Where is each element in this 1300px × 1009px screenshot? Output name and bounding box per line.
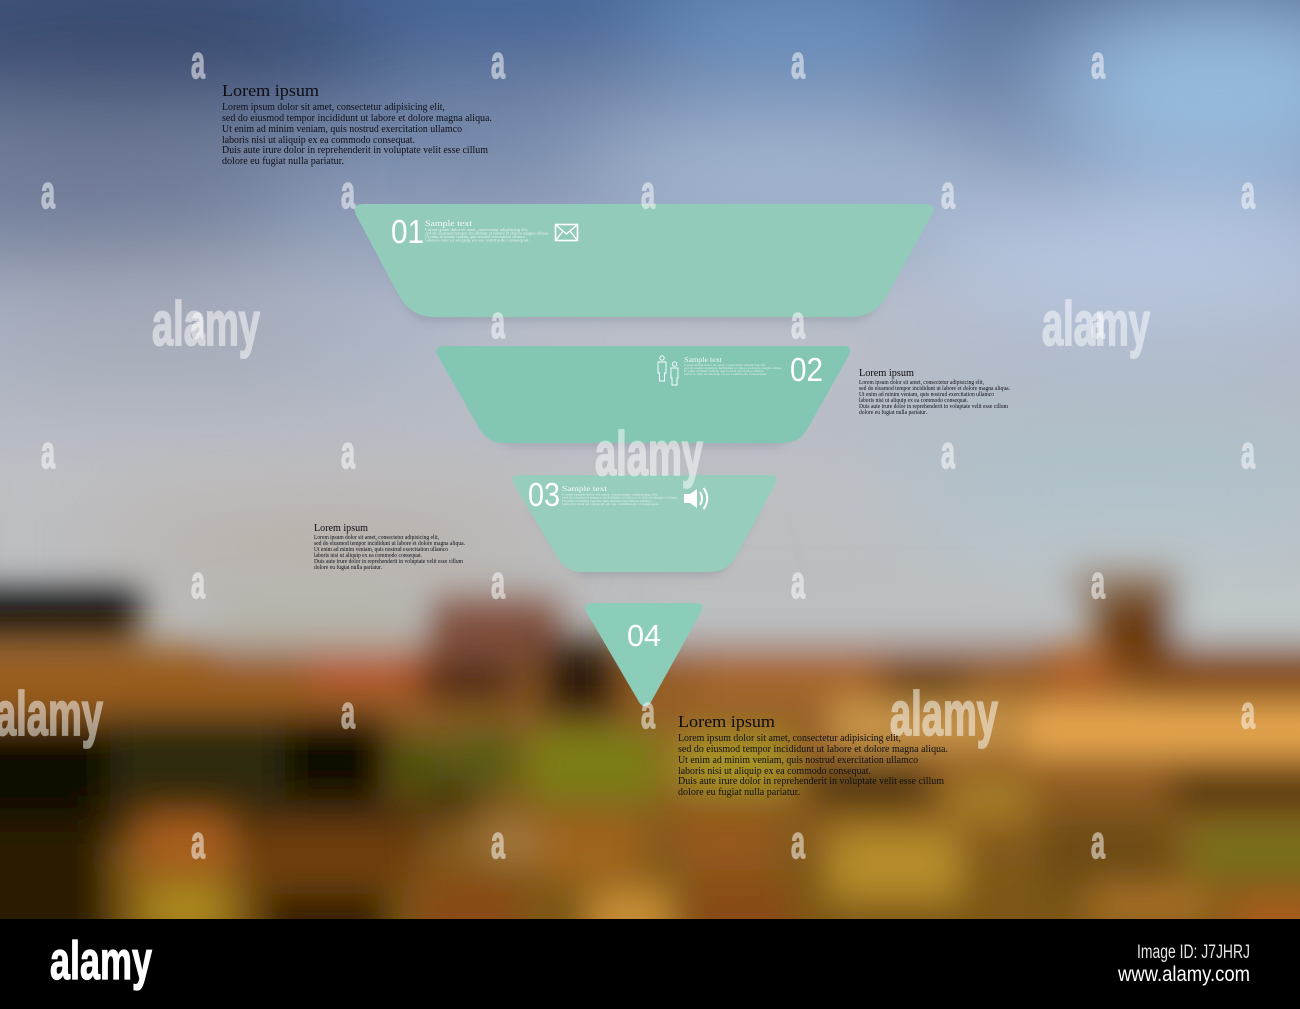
sample text 02 bbox=[684, 355, 782, 376]
text block: right of panel 02: Ut enim ad minim veniam, quis nostrud exercitation ullamco bbox=[859, 392, 994, 398]
panel 03 bbox=[512, 475, 777, 572]
website: www.alamy.com bbox=[1117, 963, 1250, 986]
text block: left of panel 03: Ut enim ad minim veniam, quis nostrud exercitation ullamco bbox=[314, 547, 448, 553]
watermark grid of letter a: a bbox=[341, 426, 355, 478]
sample text 02: sed do eiusmod tempor incididunt ut labore et dolore magna aliqua. bbox=[684, 366, 782, 370]
text block: top left bbox=[222, 81, 492, 167]
right tree bbox=[1095, 585, 1173, 675]
panel 01 bbox=[355, 204, 933, 317]
large alamy watermarks bbox=[0, 290, 1150, 749]
sample text 03: sed do eiusmod tempor incididunt ut labore et dolore magna aliqua. bbox=[562, 496, 678, 500]
watermark grid of letter a: a bbox=[1241, 426, 1255, 478]
right highlights bbox=[1020, 705, 1300, 755]
watermark grid of letter a: a bbox=[1091, 816, 1105, 868]
watermark grid of letter a: a bbox=[1091, 296, 1105, 348]
text block: top left: Lorem ipsum bbox=[222, 81, 319, 100]
watermark grid of letter a: a bbox=[1091, 36, 1105, 88]
watermark grid of letter a: a bbox=[491, 36, 505, 88]
text block: bottom right of panel 04: dolore eu fugiat nulla pariatur. bbox=[678, 787, 800, 798]
foreground bbox=[0, 820, 110, 960]
text block: right of panel 02: Lorem ipsum bbox=[859, 368, 914, 379]
watermark grid of letter a: a bbox=[491, 816, 505, 868]
footer bar bbox=[0, 919, 1300, 1009]
text block: right of panel 02: laboris nisi ut aliquip ex ea commodo consequat. bbox=[859, 398, 968, 404]
sample text 01: Ut enim ad minim veniam, quis nostrud exercitation ullamco bbox=[425, 235, 525, 240]
icon: envelope bbox=[556, 224, 578, 240]
text block: left of panel 03: sed do eiusmod tempor incididunt ut labore et dolore magna aliqua. bbox=[314, 541, 465, 547]
text block: left of panel 03: Lorem ipsum bbox=[314, 523, 368, 534]
large alamy watermarks: alamy bbox=[1042, 290, 1150, 359]
sample text 02: laboris nisi ut aliquip ex ea commodo consequat. bbox=[684, 372, 767, 376]
left tree line bbox=[0, 592, 140, 640]
sample text 03: Sample text bbox=[562, 484, 608, 493]
text block: top left: sed do eiusmod tempor incididunt ut labore et dolore magna aliqua. bbox=[222, 113, 492, 124]
text block: left of panel 03 bbox=[314, 523, 465, 571]
watermark grid of letter a: a bbox=[341, 686, 355, 738]
watermark grid of letter a: a bbox=[191, 36, 205, 88]
number 04: 04 bbox=[627, 618, 661, 653]
text block: bottom right of panel 04: Lorem ipsum dolor sit amet, consectetur adipisicing elit, bbox=[678, 733, 901, 744]
text block: top left: dolore eu fugiat nulla pariatur. bbox=[222, 156, 344, 167]
large alamy watermarks: alamy bbox=[152, 290, 260, 359]
text block: left of panel 03: Lorem ipsum dolor sit amet, consectetur adipisicing elit, bbox=[314, 535, 439, 541]
watermark grid of letter a: a bbox=[191, 816, 205, 868]
footer logo: alamy bbox=[50, 931, 152, 991]
panel 02 bbox=[437, 346, 850, 443]
text block: right of panel 02: Duis aute irure dolor in reprehenderit in voluptate velit esse cillum bbox=[859, 404, 1008, 410]
text block: left of panel 03: Duis aute irure dolor in reprehenderit in voluptate velit esse cillum bbox=[314, 559, 463, 565]
watermark grid of letter a: a bbox=[791, 556, 805, 608]
funnel panel shadows bbox=[375, 240, 905, 577]
text block: right of panel 02: dolore eu fugiat nulla pariatur. bbox=[859, 409, 927, 416]
large alamy watermarks: alamy bbox=[890, 680, 998, 749]
text block: bottom right of panel 04: sed do eiusmod tempor incididunt ut labore et dolore magna aliqua. bbox=[678, 744, 948, 755]
sample text 01: sed do eiusmod tempor incididunt ut labore et dolore magna aliqua. bbox=[425, 232, 549, 236]
text block: top left: Lorem ipsum dolor sit amet, consectetur adipisicing elit, bbox=[222, 102, 445, 113]
text block: top left: Ut enim ad minim veniam, quis nostrud exercitation ullamco bbox=[222, 124, 462, 135]
sample text 01: Sample text bbox=[425, 219, 473, 228]
image id: Image ID: J7JHRJ bbox=[1137, 942, 1250, 963]
sample text 03: Lorem ipsum dolor sit amet, consectetur adipisicing elit, bbox=[562, 492, 658, 498]
dark green band bbox=[0, 720, 130, 820]
text block: bottom right of panel 04: Lorem ipsum bbox=[678, 712, 775, 731]
number 01: 01 bbox=[391, 213, 424, 250]
watermark grid of letter a: a bbox=[191, 296, 205, 348]
sample text 01 bbox=[425, 219, 549, 242]
sample text 02: Sample text bbox=[684, 355, 723, 364]
watermark grid of letter a: a bbox=[941, 166, 955, 218]
watermark grid of letter a: a bbox=[1241, 686, 1255, 738]
text block: bottom right of panel 04: Ut enim ad minim veniam, quis nostrud exercitation ullamco bbox=[678, 755, 918, 766]
text block: bottom right of panel 04 bbox=[678, 712, 948, 798]
watermark grid of letter a: a bbox=[641, 686, 655, 738]
text block: bottom right of panel 04: laboris nisi ut aliquip ex ea commodo consequat. bbox=[678, 766, 871, 777]
icon: speaker bbox=[684, 488, 707, 509]
watermark grid of letter a: a bbox=[491, 296, 505, 348]
sample text 03: Ut enim ad minim veniam, quis nostrud exercitation ullamco bbox=[562, 499, 652, 504]
large alamy watermarks: alamy bbox=[595, 420, 703, 489]
text block: left of panel 03: dolore eu fugiat nulla pariatur. bbox=[314, 564, 382, 571]
watermark grid of letter a: a bbox=[341, 166, 355, 218]
watermark grid of letter a: a bbox=[41, 166, 55, 218]
number 03: 03 bbox=[528, 476, 560, 513]
text block: right of panel 02 bbox=[859, 368, 1010, 416]
watermark grid of letter a: a bbox=[191, 556, 205, 608]
text block: bottom right of panel 04: Duis aute irure dolor in reprehenderit in voluptate velit esse cillum bbox=[678, 776, 944, 787]
icon: people bbox=[658, 356, 678, 385]
sample text 02: Ut enim ad minim veniam, quis nostrud exercitation ullamco bbox=[684, 369, 764, 374]
text block: right of panel 02: sed do eiusmod tempor incididunt ut labore et dolore magna aliqua. bbox=[859, 386, 1010, 392]
text block: left of panel 03: laboris nisi ut aliquip ex ea commodo consequat. bbox=[314, 553, 422, 559]
sample text 01: laboris nisi ut aliquip ex ea commodo consequat. bbox=[425, 238, 530, 242]
panel 04 bbox=[585, 603, 702, 706]
text block: top left: laboris nisi ut aliquip ex ea commodo consequat. bbox=[222, 135, 415, 146]
watermark grid of letter a: a bbox=[1241, 166, 1255, 218]
watermark grid of letter a: a bbox=[791, 36, 805, 88]
sample text 02: Lorem ipsum dolor sit amet, consectetur adipisicing elit, bbox=[684, 363, 766, 368]
sample text 03 bbox=[562, 484, 678, 506]
large alamy watermarks: alamy bbox=[0, 680, 103, 749]
watermark grid of letter a: a bbox=[491, 556, 505, 608]
sample text 03: laboris nisi ut aliquip ex ea commodo consequat. bbox=[562, 502, 660, 506]
text block: right of panel 02: Lorem ipsum dolor sit amet, consectetur adipisicing elit, bbox=[859, 380, 984, 386]
number 02: 02 bbox=[790, 351, 823, 388]
sample text 01: Lorem ipsum dolor sit amet, consectetur adipisicing elit, bbox=[425, 228, 528, 233]
watermark grid of letter a: a bbox=[1091, 556, 1105, 608]
watermark grid of letter a: a bbox=[41, 426, 55, 478]
watermark grid of letter a: a bbox=[791, 816, 805, 868]
sky remnants on horizon bbox=[220, 600, 410, 650]
watermark grid of letter a: a bbox=[941, 426, 955, 478]
watermark grid of letter a: a bbox=[641, 166, 655, 218]
text block: top left: Duis aute irure dolor in reprehenderit in voluptate velit esse cillum bbox=[222, 145, 488, 156]
watermark grid of letter a: a bbox=[791, 296, 805, 348]
watermark grid of letter a bbox=[41, 36, 1255, 868]
